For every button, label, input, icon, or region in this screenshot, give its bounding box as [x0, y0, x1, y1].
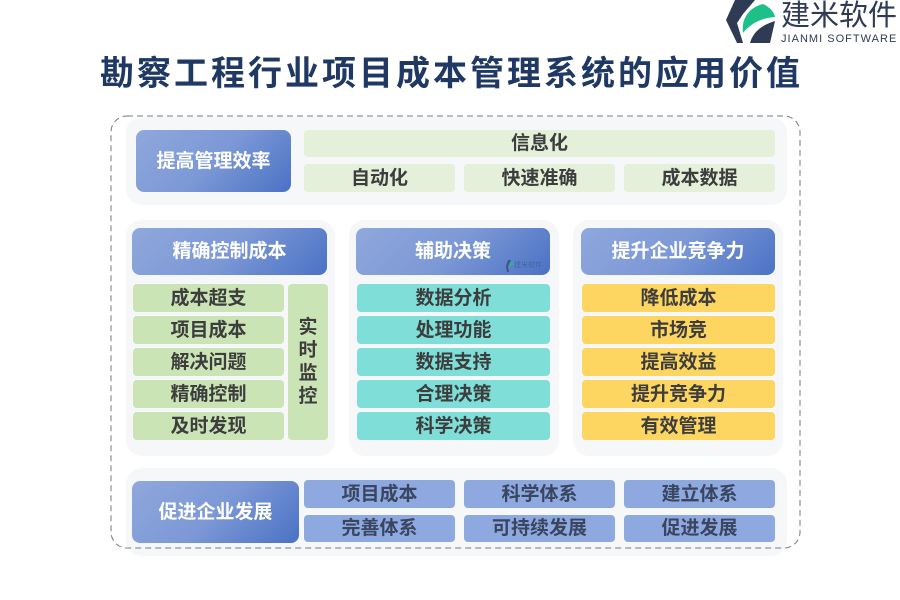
- item: [464, 164, 615, 192]
- logo: [726, 0, 897, 45]
- item: 自动化: [351, 168, 408, 188]
- item: 市场竞: [650, 320, 707, 340]
- item: 科学决策: [415, 416, 492, 436]
- item: 成本数据: [661, 168, 738, 188]
- item: 信息化: [511, 133, 568, 154]
- item: 可持续发展: [492, 518, 587, 539]
- item: 成本超支: [170, 288, 246, 308]
- item: [582, 412, 775, 440]
- heading: cost control: 精确控制成本: [172, 241, 286, 262]
- item: [464, 480, 615, 508]
- item: [304, 515, 455, 542]
- panel: cost control: [126, 220, 335, 456]
- item: 提高效益: [640, 352, 716, 372]
- item: 项目成本: [170, 320, 246, 340]
- item: 完善体系: [341, 518, 418, 539]
- item: 建立体系: [661, 484, 738, 504]
- watermark: [506, 260, 542, 272]
- item: 有效管理: [640, 416, 716, 436]
- item: 降低成本: [640, 288, 716, 308]
- item: 合理决策: [415, 384, 492, 404]
- logo name: 建米软件: [781, 0, 897, 32]
- item: [357, 316, 550, 344]
- item: [624, 480, 775, 508]
- item: real-time monitoring: 实时监控: [298, 317, 318, 407]
- item: [357, 412, 550, 440]
- item: [582, 316, 775, 344]
- item: [304, 164, 455, 192]
- item: 精确控制: [170, 384, 246, 404]
- heading: efficiency: [136, 130, 291, 192]
- item: 促进发展: [661, 518, 738, 539]
- item: [133, 380, 284, 408]
- item: [357, 284, 550, 312]
- item: 数据分析: [415, 288, 492, 308]
- item: [304, 130, 775, 157]
- item: [133, 284, 284, 312]
- item: [582, 380, 775, 408]
- item: [304, 480, 455, 508]
- item: [582, 348, 775, 376]
- heading: decision support: 辅助决策: [415, 241, 491, 262]
- item: [582, 284, 775, 312]
- logo subtitle: JIANMI SOFTWARE: [781, 33, 897, 45]
- icon: watermark logo: [506, 260, 514, 272]
- panel: decision support: [349, 220, 559, 456]
- item: real-time monitoring: [288, 284, 328, 440]
- panel: efficiency: [126, 117, 787, 205]
- heading: efficiency: 提高管理效率: [156, 150, 270, 172]
- item: 解决问题: [170, 352, 246, 372]
- heading: competitiveness: [581, 228, 775, 275]
- item: [357, 348, 550, 376]
- item: [624, 515, 775, 542]
- item: [133, 316, 284, 344]
- heading: enterprise development: 促进企业发展: [158, 502, 272, 522]
- item: 及时发现: [170, 416, 246, 436]
- item: [357, 380, 550, 408]
- heading: competitiveness: 提升企业竞争力: [611, 241, 744, 262]
- item: 项目成本: [341, 484, 418, 504]
- item: [464, 515, 615, 542]
- item: 科学体系: [501, 484, 578, 504]
- item: [624, 164, 775, 192]
- item: [133, 412, 284, 440]
- title: 勘察工程行业项目成本管理系统的应用价值: [100, 55, 803, 93]
- icon: hexagon leaf: [726, 0, 775, 43]
- watermark: 建米软件: [514, 262, 542, 269]
- heading: cost control: [132, 228, 327, 275]
- item: 快速准确: [501, 168, 578, 188]
- panel: enterprise development: [126, 468, 787, 556]
- heading: enterprise development: [132, 481, 299, 543]
- heading: decision support: [356, 228, 550, 275]
- item: 数据支持: [415, 352, 492, 372]
- panel: competitiveness: [573, 220, 783, 456]
- item: 提升竞争力: [631, 384, 726, 404]
- item: 处理功能: [415, 320, 492, 340]
- item: [133, 348, 284, 376]
